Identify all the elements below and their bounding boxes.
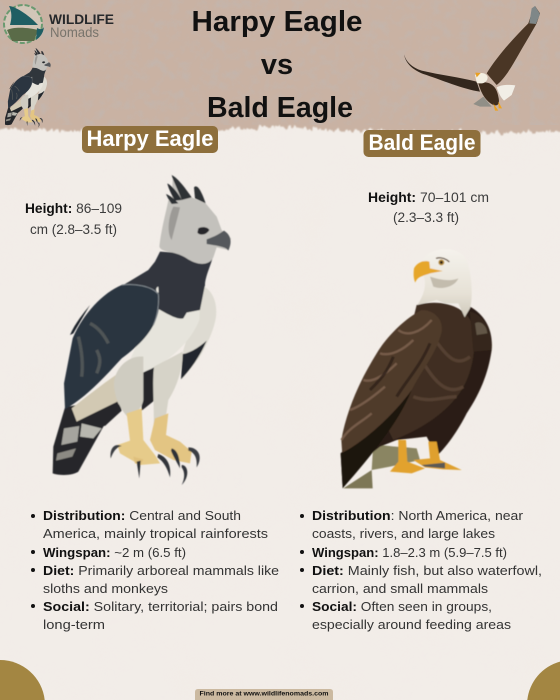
logo wordmark [49, 12, 114, 40]
fact list: Bald Eagle: especially around feeding areas [312, 617, 512, 632]
fact list: Harpy Eagle: Social: Solitary, territorial; pairs bond [43, 599, 278, 614]
icon: logo badge [4, 5, 44, 43]
height text: Bald Eagle: (2.3–3.3 ft) [393, 210, 459, 225]
fact list: Harpy Eagle: Wingspan: ~2 m (6.5 ft) [43, 545, 186, 560]
footer link: Find more at www.wildlifenomads.com [200, 690, 329, 698]
icon: small harpy eagle [5, 48, 51, 128]
fact list: Bald Eagle: Wingspan: 1.8–2.3 m (5.9–7.5 ft) [312, 545, 507, 560]
fact list: Harpy Eagle [31, 508, 279, 632]
fact list: Bald Eagle: carrion, and small mammals [312, 581, 489, 596]
label: Bald Eagle: Bald Eagle [368, 130, 476, 155]
logo wordmark: Nomads [50, 24, 99, 40]
fact list: Harpy Eagle: America, mainly tropical rainforests [43, 526, 269, 541]
footer link [195, 689, 333, 700]
torn header band [0, 0, 560, 133]
title: Bald Eagle [207, 92, 353, 124]
illustration: harpy eagle [53, 175, 231, 485]
fact list: Bald Eagle: Distribution : North America, near [312, 508, 524, 523]
illustration: bald eagle [341, 249, 492, 488]
height text: Bald Eagle [368, 190, 489, 225]
fact list: Bald Eagle: Diet: Mainly fish, but also waterfowl, [312, 563, 542, 578]
fact list: Harpy Eagle: sloths and monkeys [43, 581, 169, 596]
fact list: Harpy Eagle: Distribution: Central and South [43, 508, 241, 523]
fact list: Bald Eagle: coasts, rivers, and large lakes [312, 526, 496, 541]
corner circle left [0, 660, 45, 700]
height text: Harpy Eagle: Height: 86–109 [25, 201, 122, 216]
logo [4, 5, 114, 43]
title: Harpy Eagle [192, 6, 362, 38]
fact list: Bald Eagle: Social: Often seen in groups, [312, 599, 492, 614]
fact list: Harpy Eagle: Diet: Primarily arboreal mammals like [43, 563, 279, 578]
fact list: Harpy Eagle: long-term [43, 617, 105, 632]
bullets [31, 514, 35, 608]
height text: Bald Eagle: Height: 70–101 cm [368, 190, 489, 205]
label: Harpy Eagle: Harpy Eagle [86, 126, 214, 151]
height text: Harpy Eagle: cm (2.8–3.5 ft) [30, 222, 117, 237]
height text: Harpy Eagle [25, 201, 122, 237]
logo wordmark: WILDLIFE [49, 12, 114, 27]
fact list: Bald Eagle [300, 508, 542, 632]
title: vs [261, 49, 293, 81]
icon: flying bald eagle [404, 6, 540, 111]
title [192, 6, 362, 124]
bullets [300, 514, 304, 608]
corner circle right [527, 662, 560, 700]
